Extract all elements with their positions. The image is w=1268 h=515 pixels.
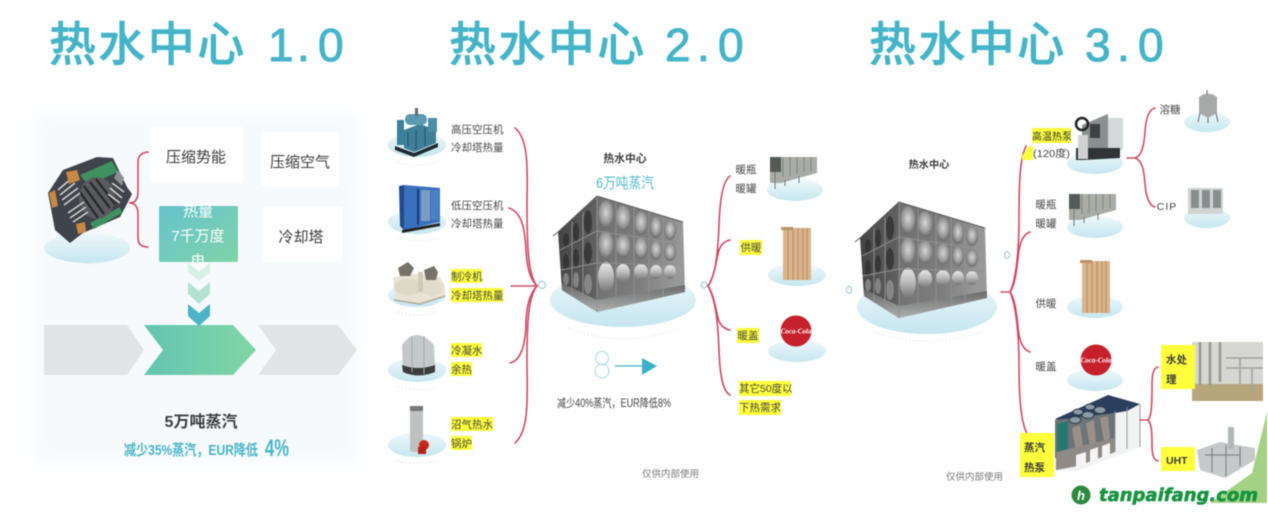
icon: high temperature heat pump: [1067, 114, 1123, 174]
title: 热水中心 2.0: 热水中心: [449, 18, 647, 71]
icon: radiator: [768, 227, 826, 286]
text: 其它50度以下热需求: 其它50度以: [739, 382, 793, 395]
bracket: 溶糖 CIP: [1127, 108, 1155, 207]
watermark: tanpaifang.com: h: [1077, 488, 1085, 503]
text: 供暖: 供暖: [740, 241, 762, 254]
text: 水处理: [1161, 345, 1195, 389]
nodes: [846, 252, 1010, 294]
bracket: [129, 152, 148, 247]
text: 制冷机冷却塔热量: 冷却塔热量: [451, 289, 504, 302]
icon: high pressure compressor: [395, 108, 438, 157]
text: 蒸汽热泵: 热泵: [1024, 461, 1046, 474]
card: 热量 7千万度电: [159, 203, 238, 270]
card: 冷却塔: [263, 207, 342, 262]
icon: 8 symbol: [595, 352, 609, 378]
text: CIP: CIP: [1157, 201, 1177, 213]
text: 沼气热水锅炉: 锅炉: [451, 438, 472, 450]
text: 制冷机冷却塔热量: 制冷机: [451, 270, 483, 283]
text: 高压空压机冷却塔热量: [451, 123, 504, 154]
text: 暖瓶暖罐: 暖瓶: [736, 163, 757, 176]
icon: cooling tower: [402, 335, 435, 376]
panel: 热水中心 1.0: [34, 114, 359, 463]
icon: biogas boiler: [410, 406, 429, 454]
text: 制冷机冷却塔热量: [451, 269, 504, 302]
icon: steam heat pump: [1055, 395, 1140, 471]
watermark: tanpaifang.com: tanpaifang.com: [1099, 486, 1258, 506]
text: 热水中心: 热水中心: [909, 158, 949, 171]
text: 蒸汽热泵: 蒸汽: [1024, 441, 1046, 454]
text: 暖盖: 暖盖: [738, 329, 759, 342]
text: 减少35%蒸汽 EUR降低 4%: 减少35%蒸汽，EUR降低: [124, 441, 258, 459]
icon: stainless water tank: [855, 202, 987, 318]
text: 热水中心: 热水中心: [603, 151, 647, 165]
process arrow: left: [44, 325, 144, 375]
text: 6万吨蒸汽: 6万吨蒸汽: [596, 175, 654, 192]
text: UHT: [1161, 447, 1195, 471]
icon: coca-cola cap: [1067, 344, 1123, 391]
platforms: [388, 133, 446, 464]
text: 供暖: 供暖: [1036, 297, 1057, 310]
text: 蒸汽热泵: [1020, 433, 1054, 477]
text: 高压空压机冷却塔热量: 冷却塔热量: [451, 141, 504, 154]
curves: outputs: [708, 176, 730, 395]
icon: low pressure compressor: [399, 185, 440, 233]
text: 沼气热水锅炉: 沼气热水: [451, 418, 493, 431]
title: 热水中心 2.0: [449, 18, 744, 71]
icon: screw compressor: [44, 157, 132, 264]
watermark: tanpaifang.com: [1072, 412, 1267, 506]
text: 冷凝水余热: 冷凝水: [451, 344, 483, 357]
card: 冷却塔: 冷却塔: [278, 229, 324, 246]
text: 暖瓶暖罐: 暖罐: [1036, 217, 1057, 230]
panel: 热水中心 3.0: [846, 90, 1263, 483]
text: 冷凝水余热: 余热: [451, 363, 472, 376]
title: 热水中心 3.0: 3.0: [1085, 19, 1164, 71]
text: 低压空压机冷却塔热量: 冷却塔热量: [451, 217, 504, 230]
text: 其它50度以下热需求: 下热需求: [739, 401, 781, 414]
footnote: 仅供内部使用: [642, 468, 699, 480]
icon: CIP station: [1184, 188, 1230, 228]
text: 减少35%蒸汽 EUR降低 4%: 4%: [265, 435, 289, 462]
title: 热水中心 1.0: 1.0: [268, 19, 344, 71]
text: 暖瓶暖罐: 暖罐: [736, 182, 757, 195]
title: 热水中心 3.0: 热水中心: [869, 18, 1067, 71]
platform: tank: [857, 280, 997, 341]
icon: bottle warmer: [1067, 194, 1123, 238]
curves: outputs: [1001, 146, 1030, 433]
card: 热量 7千万度电: 电: [190, 253, 206, 270]
text: 高压空压机冷却塔热量: 高压空压机: [451, 123, 504, 136]
platform: tank: [550, 273, 696, 339]
icon: sugar tank: [1184, 90, 1230, 132]
card: 压缩空气: [261, 132, 339, 187]
card: 压缩空气: 压缩空气: [270, 154, 330, 171]
text: 暖瓶暖罐: 暖瓶: [1036, 198, 1057, 211]
arrow: [615, 358, 657, 375]
node: [538, 282, 546, 288]
text: 5万吨蒸汽: 5万吨蒸汽: [165, 413, 237, 431]
text: 其它50度以下热需求: [739, 381, 793, 415]
curves: inputs converge: [509, 128, 537, 443]
text: 暖盖: 暖盖: [1036, 360, 1057, 373]
text: 低压空压机冷却塔热量: [451, 199, 504, 230]
icon: coca-cola cap: [768, 316, 826, 362]
bracket: 水处理 UHT: [1140, 367, 1158, 461]
card: 压缩势能: [150, 127, 243, 183]
text: 暖瓶暖罐: [1036, 198, 1057, 230]
text: 暖瓶暖罐: [736, 163, 757, 195]
card: 热量 7千万度电: 7千万度: [171, 228, 225, 245]
icon: radiator: [1067, 260, 1123, 318]
text: 高温热泵（120度）: (120度): [1033, 147, 1070, 160]
text: 低压空压机冷却塔热量: 低压空压机: [451, 199, 504, 212]
photo: water treatment hall: [1192, 342, 1263, 401]
text: 高温热泵（120度）: [1022, 128, 1072, 160]
title: 热水中心 2.0: 2.0: [665, 19, 744, 71]
text: 水处理: 水处: [1166, 353, 1188, 366]
node: [701, 282, 707, 288]
title: 热水中心 3.0: [869, 18, 1164, 71]
icon: stainless water tank: [553, 196, 685, 312]
card: 压缩势能: 压缩势能: [166, 149, 226, 166]
icon: bottle warmer: [767, 157, 823, 201]
text: 溶糖: 溶糖: [1160, 103, 1181, 116]
text: UHT: UHT: [1166, 455, 1188, 467]
text: 冷凝水余热: [451, 343, 483, 376]
arrow: chevrons down: [188, 263, 210, 326]
title: 热水中心 1.0: 热水中心: [49, 18, 247, 71]
panel: 热水中心 2.0: [388, 108, 826, 480]
title: 热水中心 1.0: [49, 18, 344, 71]
process arrow: right: [258, 325, 357, 375]
text: 减少35%蒸汽 EUR降低 4%: [124, 435, 289, 462]
text: 减少40%蒸汽 EUR降低8%: 减少40%蒸汽，EUR降低8%: [557, 396, 671, 410]
icon: chiller: [393, 262, 445, 304]
icon: UHT machine: [1197, 427, 1255, 478]
card: 热量 7千万度电: 热量: [183, 203, 213, 220]
text: 水处理: 理: [1166, 374, 1177, 386]
text: 高温热泵（120度）: 高温热泵: [1032, 130, 1072, 143]
process arrow: active: [144, 325, 256, 375]
text: 沼气热水锅炉: [451, 417, 493, 450]
footnote: 仅供内部使用: [946, 471, 1003, 483]
